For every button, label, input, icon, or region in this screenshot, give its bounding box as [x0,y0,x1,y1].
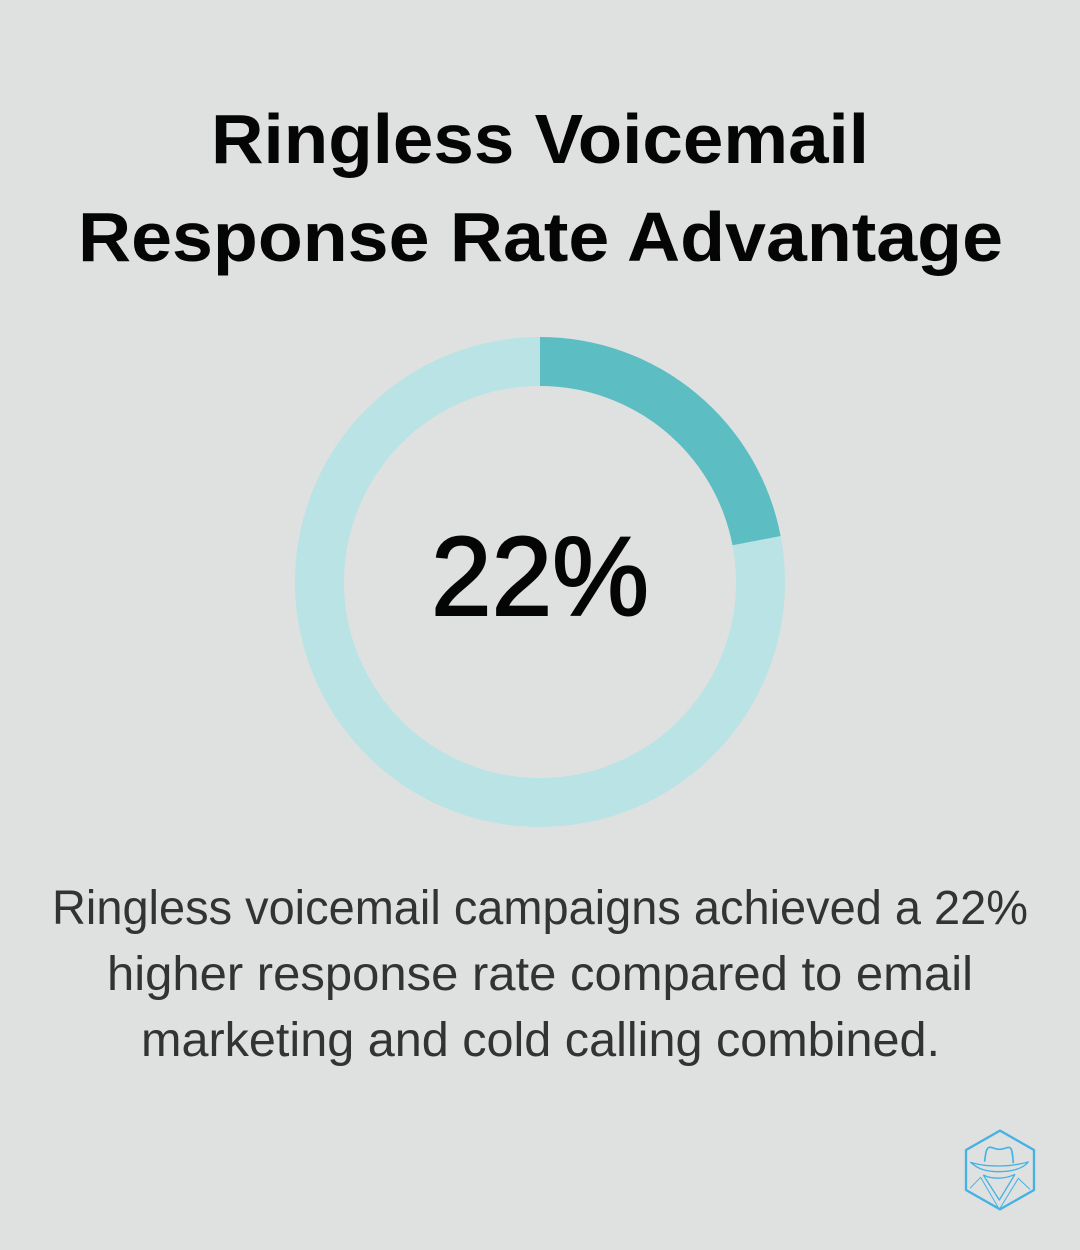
description text: Ringless voicemail campaigns achieved a 22% [52,882,1028,935]
logo hat [971,1147,1028,1178]
title: Response Rate Advantage [78,198,1003,276]
donut highlighted segment [540,337,781,545]
logo collar and coat [970,1174,1030,1209]
donut track [320,362,760,802]
icon: hexagon spy logo [966,1131,1034,1209]
donut center value: 22% [431,514,649,639]
description text [52,882,1028,1067]
title [78,100,1003,276]
donut chart: 22 percent [320,337,781,802]
description text: higher response rate compared to email [107,948,973,1001]
description text: marketing and cold calling combined. [141,1014,940,1067]
title: Ringless Voicemail [211,100,869,178]
logo hexagon outline [966,1131,1034,1209]
